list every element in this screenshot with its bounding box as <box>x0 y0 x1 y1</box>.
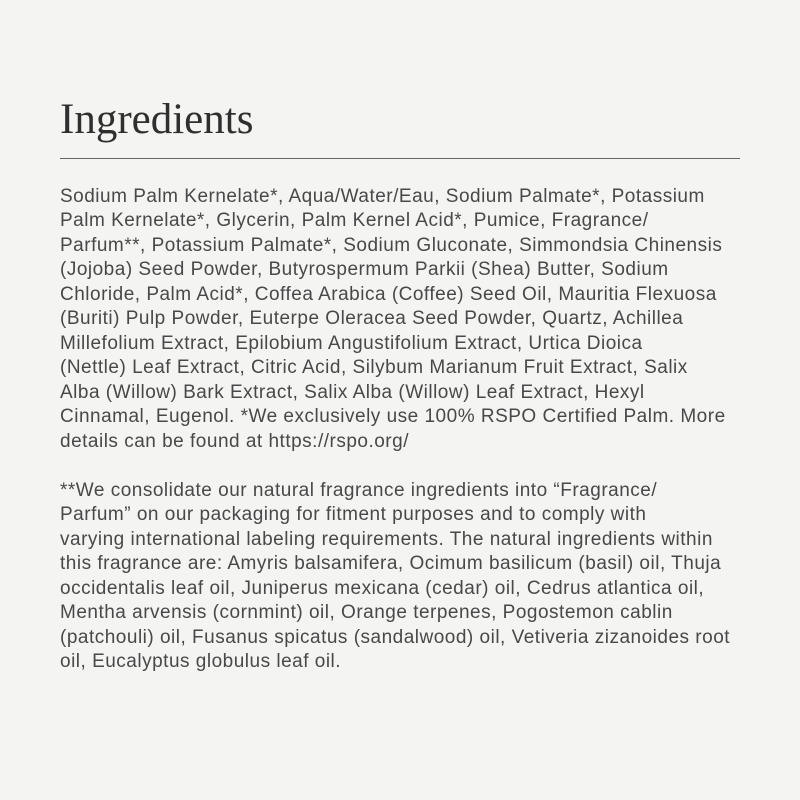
text block: ingredients list: Alba (Willow) Bark Extract, Salix Alba (Willow) Leaf Extract, Hexyl <box>60 382 645 403</box>
text block: ingredients list: (Jojoba) Seed Powder, Butyrospermum Parkii (Shea) Butter, Sodium <box>60 259 669 280</box>
text block: fragrance note: oil, Eucalyptus globulus leaf oil. <box>60 651 341 672</box>
text block: ingredients list: (Buriti) Pulp Powder, Euterpe Oleracea Seed Powder, Quartz, Achillea <box>60 308 683 329</box>
text block: ingredients list: Parfum**, Potassium Palmate*, Sodium Gluconate, Simmondsia Chinensis <box>60 235 722 256</box>
text block: fragrance note <box>60 480 730 672</box>
text block: ingredients list: (Nettle) Leaf Extract, Citric Acid, Silybum Marianum Fruit Extract, Salix <box>60 357 688 378</box>
text block: ingredients list <box>60 186 726 452</box>
text block: fragrance note: Mentha arvensis (cornmint) oil, Orange terpenes, Pogostemon cablin <box>60 602 673 623</box>
text block: fragrance note: this fragrance are: Amyris balsamifera, Ocimum basilicum (basil) oil, Thuja <box>60 553 721 574</box>
text block: ingredients list: Millefolium Extract, Epilobium Angustifolium Extract, Urtica Dioica <box>60 333 643 354</box>
text block: fragrance note: varying international labeling requirements. The natural ingredients within <box>60 529 713 550</box>
text block: ingredients list: Cinnamal, Eugenol. *We exclusively use 100% RSPO Certified Palm. More <box>60 406 726 427</box>
text block: ingredients list: Palm Kernelate*, Glycerin, Palm Kernel Acid*, Pumice, Fragrance/ <box>60 210 649 231</box>
text block: fragrance note: (patchouli) oil, Fusanus spicatus (sandalwood) oil, Vetiveria zizanoides root <box>60 627 730 648</box>
text block: ingredients list: details can be found at https://rspo.org/ <box>60 431 409 452</box>
text block: ingredients list: Chloride, Palm Acid*, Coffea Arabica (Coffee) Seed Oil, Mauritia Flexuosa <box>60 284 717 305</box>
text block: fragrance note: **We consolidate our natural fragrance ingredients into “Fragrance/ <box>60 480 657 501</box>
text block: fragrance note: occidentalis leaf oil, Juniperus mexicana (cedar) oil, Cedrus atlantica oil, <box>60 578 704 599</box>
text block: fragrance note: Parfum” on our packaging for fitment purposes and to comply with <box>60 504 646 525</box>
title: Ingredients <box>60 96 253 143</box>
text block: ingredients list: Sodium Palm Kernelate*, Aqua/Water/Eau, Sodium Palmate*, Potassium <box>60 186 705 207</box>
